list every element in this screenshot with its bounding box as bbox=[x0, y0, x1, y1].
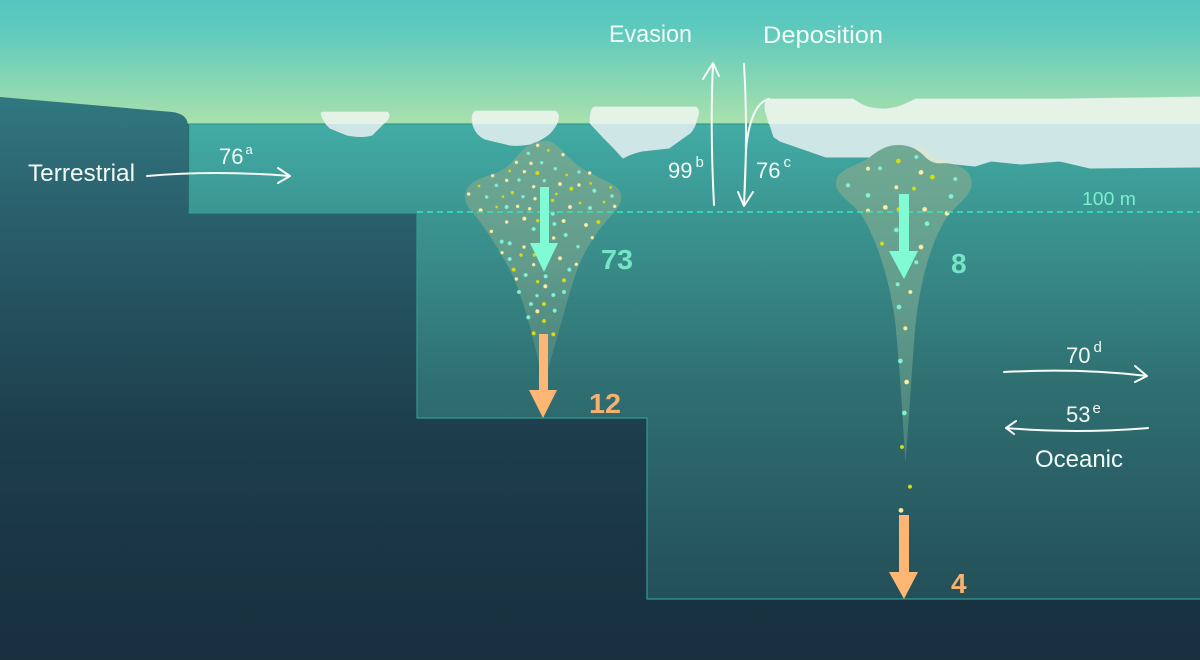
label: Deposition: Deposition bbox=[763, 22, 883, 49]
arrow: evasion bbox=[703, 63, 719, 205]
value 12: 12 bbox=[589, 388, 621, 419]
arrow: orange burial 4 bbox=[889, 515, 918, 599]
value 99b: 99 bbox=[668, 158, 692, 183]
plume left bbox=[465, 141, 621, 383]
label: 100 m depth: 100 m bbox=[1082, 189, 1136, 209]
sky bbox=[0, 0, 1200, 124]
arrow: terrestrial input bbox=[147, 168, 290, 183]
value 70d: d bbox=[1093, 339, 1102, 356]
value 53e: 53 bbox=[1066, 402, 1090, 427]
label: Evasion: Evasion bbox=[609, 21, 692, 48]
plume right bbox=[836, 145, 972, 512]
value 73: 73 bbox=[601, 244, 633, 275]
ocean water bbox=[189, 124, 1200, 599]
arrow: mint export 73 bbox=[530, 187, 558, 272]
value 53e: e bbox=[1092, 400, 1101, 417]
arrow: oceanic inflow bbox=[1004, 366, 1147, 382]
arrow: oceanic outflow bbox=[1006, 421, 1148, 434]
value 70d: 70 bbox=[1066, 343, 1090, 368]
ice floes and shelf bbox=[321, 97, 1200, 168]
value 4: 4 bbox=[951, 568, 967, 599]
arrow: deposition bbox=[738, 64, 769, 206]
100 m depth line bbox=[417, 211, 1200, 213]
water outline bbox=[189, 124, 1200, 599]
arrow: mint export 8 bbox=[889, 194, 918, 279]
value 76c: c bbox=[783, 154, 791, 171]
arrow: orange burial 12 bbox=[529, 334, 557, 418]
label: Terrestrial: Terrestrial bbox=[28, 160, 135, 187]
label: Oceanic: Oceanic bbox=[1035, 446, 1123, 473]
value 76a: a bbox=[245, 142, 253, 157]
value 76c: 76 bbox=[756, 158, 780, 183]
value 8: 8 bbox=[951, 248, 967, 279]
value 99b: b bbox=[695, 154, 704, 171]
value 76a: 76 bbox=[219, 144, 243, 169]
